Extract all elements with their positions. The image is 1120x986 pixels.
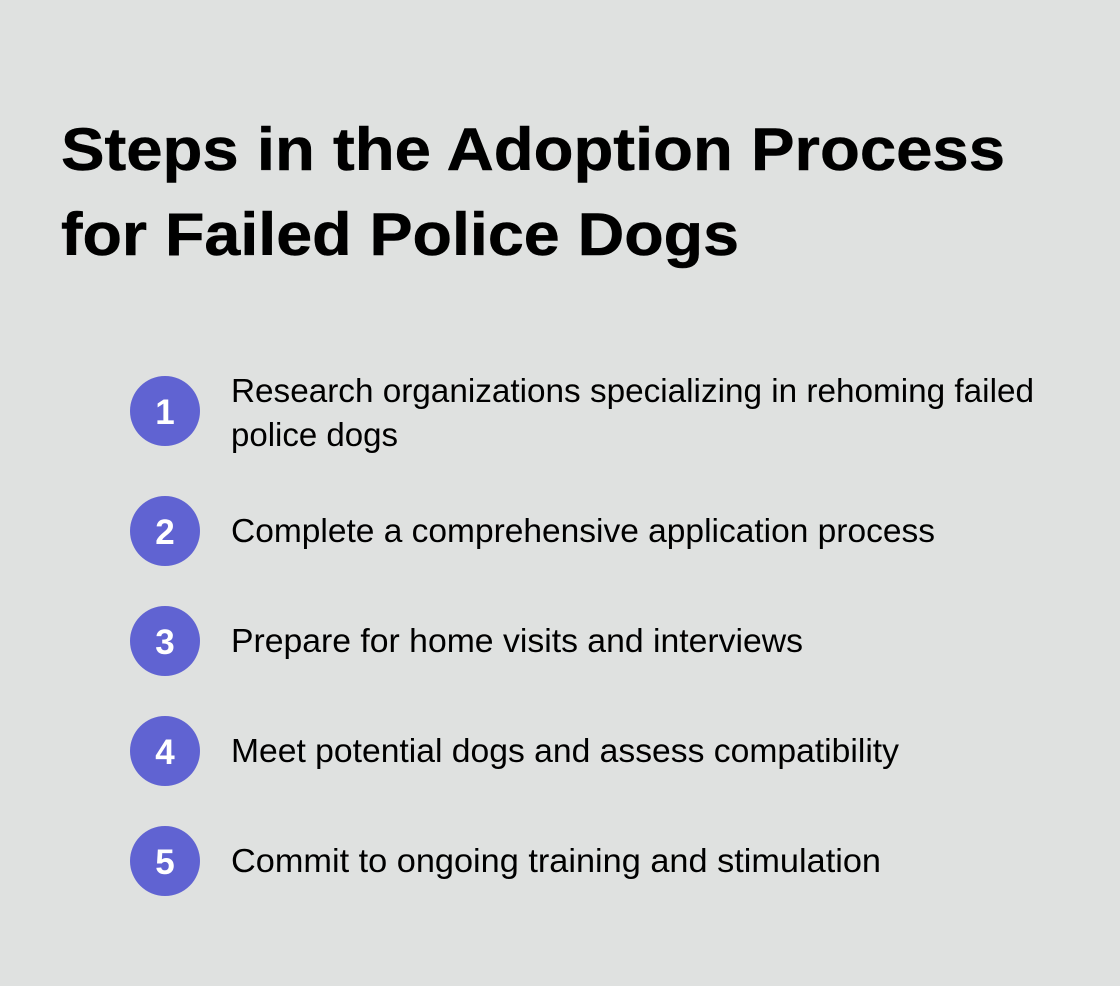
- step 1 text: police dogs: [231, 416, 398, 453]
- step 3 text: Prepare for home visits and interviews: [231, 622, 803, 659]
- step 4: [130, 716, 899, 786]
- step 2 text: Complete a comprehensive application process: [231, 512, 935, 549]
- step 1 text: Research organizations specializing in rehoming failed: [231, 372, 1034, 409]
- icon: number 3 badge: [130, 606, 200, 676]
- icon: number 3 badge: 3: [155, 623, 175, 662]
- step 5 text: Commit to ongoing training and stimulation: [231, 842, 881, 879]
- icon: number 2 badge: [130, 496, 200, 566]
- icon: number 1 badge: 1: [155, 393, 175, 432]
- icon: number 2 badge: 2: [155, 513, 175, 552]
- icon: number 5 badge: [130, 826, 200, 896]
- step 1: [130, 372, 1034, 453]
- title: for Failed Police Dogs: [61, 201, 739, 268]
- step 4 text: Meet potential dogs and assess compatibility: [231, 732, 899, 769]
- step 5: [130, 826, 881, 896]
- step 1 text: [231, 372, 1034, 453]
- icon: number 5 badge: 5: [155, 843, 175, 882]
- step 3: [130, 606, 803, 676]
- icon: number 4 badge: [130, 716, 200, 786]
- title: [61, 116, 1005, 268]
- title: Steps in the Adoption Process: [61, 116, 1005, 183]
- icon: number 4 badge: 4: [155, 733, 175, 772]
- step 2: [130, 496, 935, 566]
- icon: number 1 badge: [130, 376, 200, 446]
